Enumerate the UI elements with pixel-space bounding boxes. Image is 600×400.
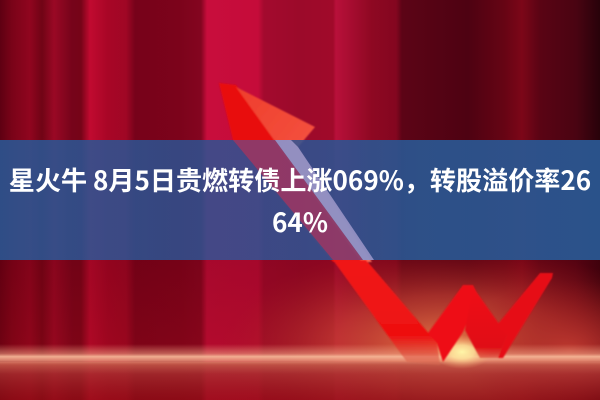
title text — [9, 160, 591, 240]
W falling stroke — [465, 287, 507, 358]
arrow light stripe — [275, 140, 374, 260]
title text: 星火牛 8月5日贵燃转债上涨069%，转股溢价率26 — [9, 160, 591, 198]
W rising stroke — [428, 285, 478, 362]
arrow body tint — [233, 140, 363, 260]
floor glow — [0, 260, 600, 400]
title text: 64% — [272, 202, 328, 240]
horizon flare — [0, 335, 600, 374]
arrow lower stroke — [333, 260, 440, 365]
arrow light facet — [236, 87, 372, 262]
W final upstroke — [497, 273, 553, 358]
title band — [0, 140, 600, 260]
rising arrow — [219, 83, 553, 365]
arrow seen through band — [233, 140, 374, 260]
arrow dark face — [219, 83, 362, 262]
